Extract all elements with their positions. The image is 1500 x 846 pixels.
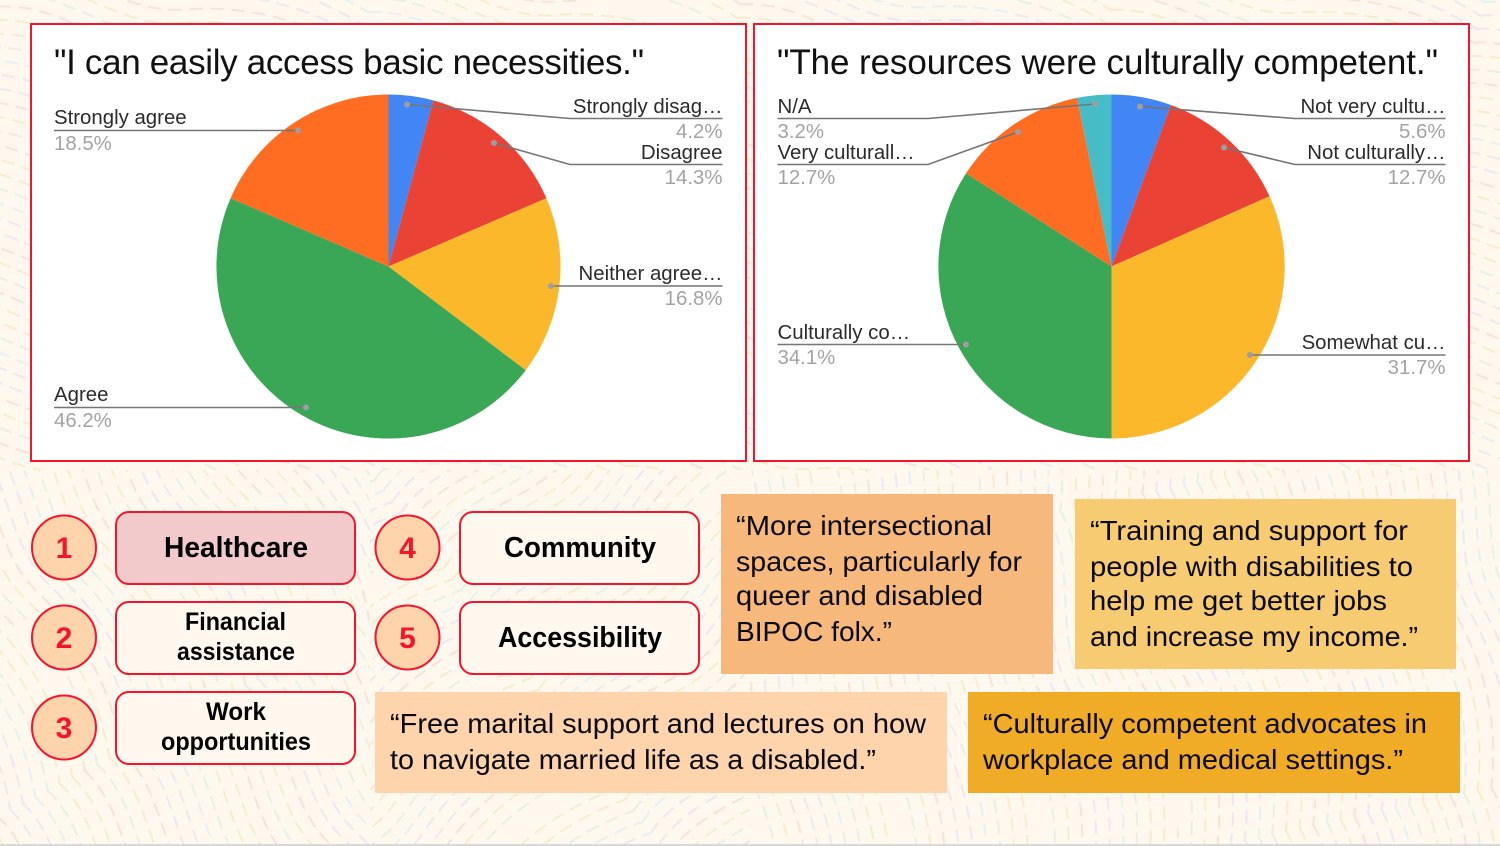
label: strongly agree 18.5%: 18.5% — [54, 133, 112, 155]
ranked item 4: community: Community — [504, 532, 656, 564]
label: not very culturally 5.6%: 5.6% — [1399, 121, 1446, 143]
quote: marital support: “Free marital support and lectures on how — [390, 708, 927, 739]
quote: intersectional spaces: BIPOC folx.” — [736, 616, 892, 647]
label: strongly agree 18.5% — [54, 107, 301, 155]
label: disagree 14.3%: 14.3% — [665, 167, 722, 189]
quote: intersectional spaces: “More intersectional — [736, 510, 992, 541]
ranked item 2: financial assistance — [32, 602, 355, 674]
label: very culturally 12.7%: 12.7% — [778, 167, 835, 189]
ranked item 4: community — [376, 512, 699, 584]
label: culturally competent 34.1%: 34.1% — [778, 347, 835, 369]
quote: training and support: “Training and support for — [1090, 515, 1408, 546]
label: N/A 3.2%: 3.2% — [778, 121, 824, 143]
ranked item 2: financial assistance: Financial — [185, 608, 286, 636]
quote: training and support: help me get better jobs — [1090, 585, 1387, 616]
ranked item 5: accessibility: Accessibility — [498, 622, 662, 654]
panel: cultural competence pie chart — [754, 24, 1469, 461]
label: culturally competent 34.1%: Culturally co… — [778, 322, 910, 344]
label: not very culturally 5.6% — [1137, 96, 1446, 143]
quote: marital support: to navigate married life as a disabled.” — [390, 744, 876, 775]
label: somewhat culturally 31.7%: Somewhat cu… — [1302, 332, 1446, 354]
label: strongly disagree 4.2% — [404, 96, 722, 143]
quote: intersectional spaces: spaces, particularly for — [736, 546, 1022, 577]
heading: cultural competence: "The resources were culturally competent." — [777, 43, 1438, 82]
ranked item 1: healthcare: Healthcare — [164, 532, 308, 564]
label: neither agree 16.8%: Neither agree… — [579, 263, 722, 285]
ranked item 3: work opportunities: Work — [206, 698, 266, 726]
ranked item 1: healthcare: 1 — [56, 532, 72, 565]
ranked item 3: work opportunities — [32, 692, 355, 764]
quote: marital support — [375, 692, 947, 793]
label: not culturally 12.7%: 12.7% — [1388, 167, 1446, 189]
ranked item 5: accessibility: 5 — [399, 622, 416, 655]
label: N/A 3.2%: N/A — [778, 96, 812, 118]
label: culturally competent 34.1% — [778, 322, 969, 369]
label: agree 46.2%: 46.2% — [54, 410, 112, 432]
ranked item 5: accessibility — [376, 602, 699, 674]
quote: culturally competent advocates: “Culturally competent advocates in — [983, 708, 1427, 739]
label: agree 46.2%: Agree — [54, 384, 108, 406]
pie chart: cultural competence — [938, 94, 1285, 438]
quote: training and support: and increase my income.” — [1090, 621, 1418, 652]
label: somewhat culturally 31.7% — [1247, 332, 1446, 379]
quote: culturally competent advocates: workplace and medical settings.” — [982, 744, 1403, 775]
label: strongly disagree 4.2%: Strongly disag… — [573, 96, 722, 118]
label: very culturally 12.7% — [778, 129, 1021, 189]
label: neither agree 16.8% — [548, 263, 722, 310]
label: agree 46.2% — [54, 384, 309, 432]
label: very culturally 12.7%: Very culturall… — [778, 142, 915, 164]
quote: intersectional spaces: queer and disabled — [736, 580, 983, 611]
label: not culturally 12.7% — [1221, 142, 1446, 189]
ranked item 2: financial assistance: 2 — [56, 622, 72, 655]
label: not very culturally 5.6%: Not very cultu… — [1300, 96, 1446, 118]
ranked item 2: financial assistance: assistance — [177, 638, 295, 666]
label: somewhat culturally 31.7%: 31.7% — [1388, 357, 1446, 379]
label: strongly agree 18.5%: Strongly agree — [54, 107, 187, 129]
label: disagree 14.3% — [491, 140, 722, 189]
quote: training and support: people with disabilities to — [1090, 551, 1413, 582]
label: strongly disagree 4.2%: 4.2% — [676, 121, 722, 143]
label: neither agree 16.8%: 16.8% — [665, 288, 722, 310]
pie chart: basic necessities — [216, 94, 561, 439]
quote: culturally competent advocates — [968, 692, 1460, 793]
ranked item 3: work opportunities: 3 — [56, 712, 72, 745]
panel: basic necessities pie chart — [31, 24, 746, 461]
label: not culturally 12.7%: Not culturally… — [1307, 142, 1446, 164]
ranked item 4: community: 4 — [399, 532, 416, 565]
label: N/A 3.2% — [778, 96, 1098, 143]
ranked item 3: work opportunities: opportunities — [161, 728, 311, 756]
heading: basic necessities: "I can easily access basic necessities." — [54, 43, 644, 82]
quote: training and support — [1075, 499, 1456, 669]
quote: intersectional spaces — [721, 494, 1053, 674]
label: disagree 14.3%: Disagree — [641, 142, 722, 164]
ranked item 1: healthcare — [32, 512, 355, 584]
